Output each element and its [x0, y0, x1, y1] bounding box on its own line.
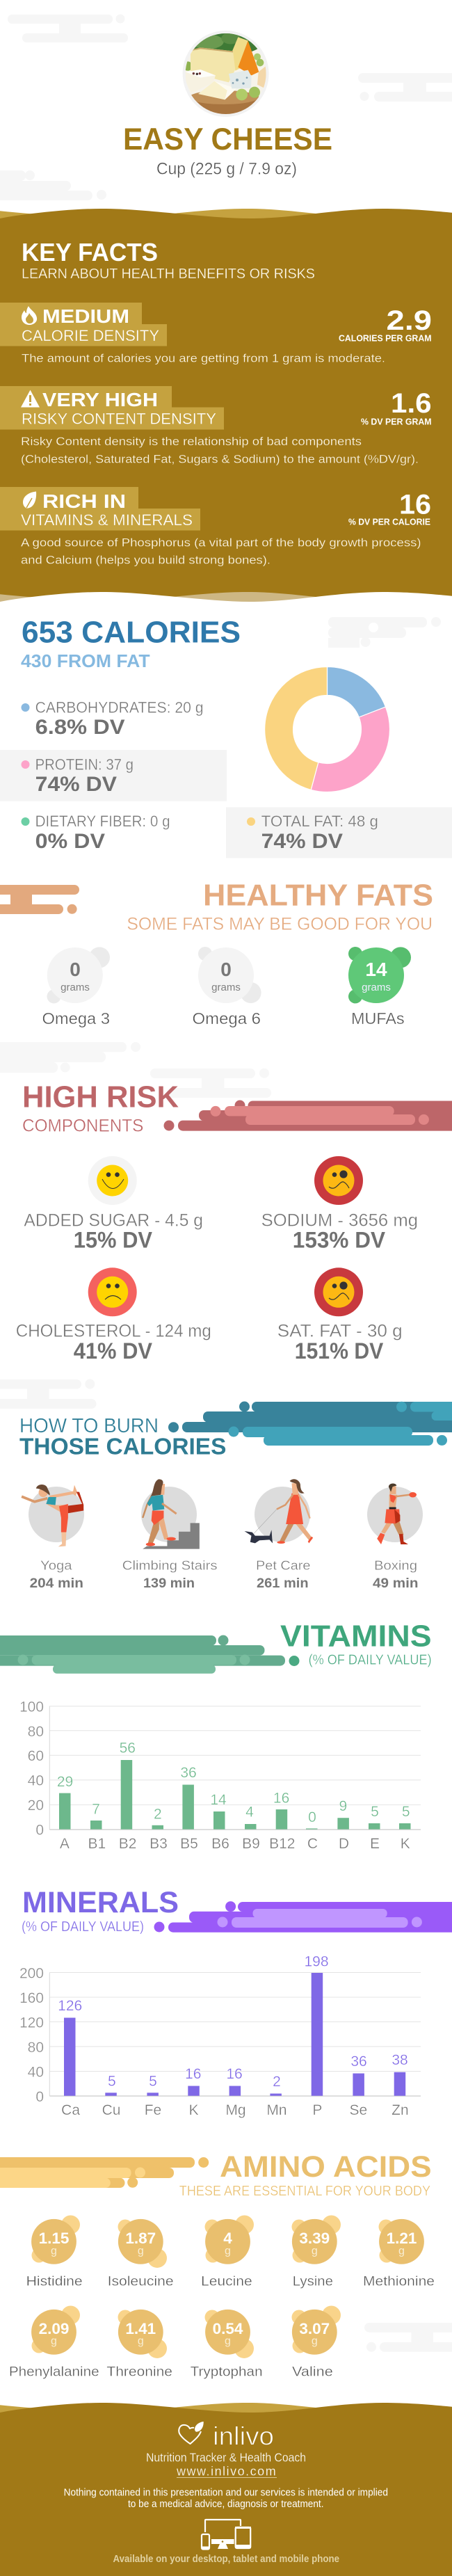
legend: protein	[21, 756, 134, 796]
heading: calories: 653 CALORIES	[22, 616, 241, 649]
amino: lysine: g	[312, 2245, 318, 2257]
bar chart: vitamins: E	[370, 1836, 380, 1852]
heading: minerals: MINERALS	[22, 1886, 179, 1919]
bar chart: minerals: 16	[185, 2066, 201, 2082]
activity: climbing stairs: Climbing Stairs	[122, 1558, 218, 1572]
bar chart: minerals: Fe	[145, 2102, 161, 2118]
panel: calories	[0, 616, 452, 858]
legend: total fat: TOTAL FAT: 48 g	[261, 813, 378, 830]
heading: vitamins: VITAMINS	[280, 1619, 432, 1653]
activity: boxing: Boxing	[374, 1558, 417, 1572]
bar chart: minerals: Cu	[102, 2102, 120, 2118]
subheading: components: COMPONENTS	[22, 1116, 143, 1135]
bar chart: vitamins: 9	[339, 1798, 347, 1814]
fact: risky content density: RISKY CONTENT DENSITY	[22, 410, 216, 427]
bar chart: vitamins: 7	[92, 1801, 100, 1817]
amino: valine: 3.07	[299, 2320, 330, 2337]
panel: vitamins	[0, 1619, 432, 1852]
activity: pet care: 261 min	[257, 1576, 309, 1591]
amino: isoleucine: 1.87	[125, 2230, 156, 2247]
amino: threonine	[106, 2310, 172, 2379]
bar chart: vitamins: 56	[120, 1740, 136, 1756]
risk: added sugar	[24, 1156, 203, 1252]
bar chart: vitamins: 80	[28, 1724, 44, 1740]
subheading: SOME FATS MAY BE GOOD FOR YOU	[127, 915, 433, 934]
activity: yoga	[22, 1485, 84, 1591]
amino: phenylalanine: 2.09	[39, 2320, 69, 2337]
fact: rich in vitamins and minerals: % DV PER CALORIE	[348, 517, 430, 527]
amino: methionine	[363, 2219, 435, 2289]
bar chart: minerals: 2	[273, 2074, 281, 2090]
risk: saturated fat	[277, 1267, 403, 1363]
bar chart: minerals: Ca	[61, 2102, 80, 2118]
image: cheese platter	[183, 28, 269, 117]
logo: inlivo: inlivo	[213, 2422, 274, 2451]
bar chart: minerals: 126	[58, 1998, 82, 2014]
amino: histidine: 1.15	[39, 2230, 69, 2247]
badge: mufas	[348, 947, 411, 1027]
disclaimer: Nothing contained in this presentation and our services is intended or implied	[64, 2487, 388, 2498]
fact: calorie density: MEDIUM	[42, 305, 129, 327]
amino: methionine: Methionine	[363, 2273, 435, 2289]
activity: boxing: 49 min	[373, 1576, 419, 1591]
legend: dietary fiber	[21, 813, 170, 853]
fact: calorie density: 2.9	[387, 305, 432, 336]
bar chart: minerals: 38	[392, 2052, 408, 2068]
icon: flame	[22, 306, 37, 325]
amino: threonine: 1.41	[125, 2320, 156, 2337]
bar chart: vitamins	[19, 1699, 421, 1852]
bar chart: vitamins: 4	[245, 1805, 254, 1821]
bar chart: vitamins: B2	[119, 1836, 136, 1852]
legend: total fat: 74% DV	[261, 830, 343, 853]
bar chart: vitamins: 5	[371, 1804, 379, 1820]
amino: leucine: g	[225, 2245, 231, 2257]
bar chart: vitamins: D	[339, 1836, 349, 1852]
heading: healthy fats: HEALTHY FATS	[203, 879, 433, 912]
amino: valine	[292, 2305, 341, 2379]
bar chart: minerals: Mg	[225, 2102, 246, 2118]
panel: high risk	[0, 1042, 452, 1363]
bar chart: vitamins: B3	[150, 1836, 168, 1852]
panel: healthy fats	[0, 879, 433, 1027]
badge: omega 3: Omega 3	[42, 1009, 110, 1027]
bar chart: vitamins: 36	[180, 1765, 197, 1781]
risk: cholesterol: 41% DV	[74, 1338, 153, 1363]
disclaimer	[64, 2487, 388, 2510]
badge: omega 6: 0	[220, 959, 232, 980]
activity: climbing stairs	[122, 1479, 218, 1591]
activity: yoga: 204 min	[30, 1576, 83, 1591]
risk: cholesterol	[16, 1267, 211, 1363]
amino: histidine: g	[51, 2245, 57, 2257]
heading: key facts: KEY FACTS	[22, 238, 158, 266]
bar chart: minerals: 200	[19, 1966, 44, 1981]
bar chart: minerals: 80	[28, 2040, 44, 2056]
heading: those calories: THOSE CALORIES	[19, 1434, 226, 1459]
donut chart	[265, 666, 389, 792]
amino: threonine: Threonine	[106, 2364, 172, 2379]
amino: isoleucine: g	[138, 2245, 144, 2257]
amino: histidine: Histidine	[26, 2273, 83, 2289]
legend: carbohydrates: CARBOHYDRATES: 20 g	[35, 698, 204, 717]
amino: lysine: Lysine	[293, 2273, 333, 2289]
fact: calorie density: CALORIES PER GRAM	[339, 333, 431, 344]
fact: rich in vitamins and minerals: A good source of Phosphorus (a vital part of the body growth process)	[21, 536, 421, 549]
activity: pet care: Pet Care	[256, 1558, 310, 1572]
amino: methionine: g	[398, 2245, 405, 2257]
bar chart: vitamins: B6	[211, 1836, 229, 1852]
badge: mufas: MUFAs	[351, 1009, 405, 1027]
bar chart: vitamins: 14	[210, 1792, 227, 1808]
risk: saturated fat: SAT. FAT - 30 g	[277, 1322, 403, 1341]
bar chart: minerals: 16	[226, 2066, 243, 2082]
fact: calorie density	[0, 303, 432, 365]
bar chart: minerals	[19, 1953, 421, 2118]
activity: boxing	[367, 1484, 423, 1591]
amino: valine: Valine	[292, 2364, 333, 2379]
amino: phenylalanine: g	[51, 2335, 57, 2347]
bar chart: vitamins: 0	[308, 1809, 316, 1825]
fact: risky content density: % DV PER GRAM	[361, 416, 432, 426]
legend: carbohydrates	[21, 698, 204, 739]
fact: risky content density: VERY HIGH	[42, 389, 158, 410]
amino: tryptophan: g	[225, 2335, 231, 2347]
bar chart: minerals: Mn	[266, 2102, 287, 2118]
subheading: (% OF DAILY VALUE)	[309, 1653, 432, 1668]
fact: rich in vitamins and minerals: RICH IN	[42, 490, 126, 512]
risk: sodium: SODIUM - 3656 mg	[261, 1210, 418, 1230]
bar chart: vitamins: 16	[273, 1790, 289, 1806]
badge: omega 3: grams	[60, 982, 90, 993]
bar chart: minerals: P	[312, 2102, 322, 2118]
risk: added sugar: ADDED SUGAR - 4.5 g	[24, 1210, 203, 1230]
amino: lysine	[292, 2215, 341, 2289]
icon: warning triangle	[21, 390, 40, 408]
badge: omega 6: grams	[211, 982, 241, 993]
bar chart: vitamins: K	[401, 1836, 410, 1852]
fact: risky content density: Risky Content density is the relationship of bad components	[21, 435, 362, 448]
logo: inlivo	[179, 2422, 274, 2451]
amino: leucine: 4	[223, 2230, 232, 2247]
panel: key facts	[0, 209, 452, 607]
bar chart: vitamins: A	[60, 1836, 70, 1852]
subheading: from fat: 430 FROM FAT	[21, 650, 150, 671]
icon: devices	[202, 2520, 251, 2550]
risk: added sugar: 15% DV	[74, 1227, 153, 1252]
bar chart: minerals: 160	[19, 1990, 44, 2006]
bar chart: minerals: 120	[19, 2015, 44, 2031]
fact: rich in vitamins and minerals: VITAMINS & MINERALS	[21, 511, 193, 529]
activity: pet care	[245, 1479, 313, 1591]
tagline: Nutrition Tracker & Health Coach	[146, 2450, 306, 2464]
activity: yoga: Yoga	[40, 1558, 72, 1572]
bar chart: vitamins: 60	[28, 1748, 44, 1764]
bar chart: minerals: 36	[350, 2054, 367, 2070]
subheading: (% OF DAILY VALUE)	[22, 1919, 144, 1935]
fact: calorie density: The amount of calories you are getting from 1 gram is moderate.	[22, 352, 385, 365]
legend: dietary fiber: 0% DV	[35, 830, 105, 853]
badge: mufas: 14	[365, 959, 387, 980]
legend: protein: 74% DV	[35, 773, 117, 796]
title: EASY CHEESE	[123, 122, 332, 157]
amino: tryptophan: Tryptophan	[191, 2364, 263, 2379]
bar chart: vitamins: B1	[88, 1836, 106, 1852]
risk: sodium	[261, 1156, 418, 1252]
panel: how to burn	[0, 1379, 452, 1591]
amino: phenylalanine: Phenylalanine	[9, 2364, 99, 2379]
fact: rich in vitamins and minerals: and Calcium (helps you build strong bones).	[21, 554, 271, 567]
fact: risky content density	[0, 386, 432, 466]
bar chart: minerals: 198	[304, 1953, 329, 1969]
activity: climbing stairs: 139 min	[143, 1576, 195, 1591]
bar chart: vitamins: 2	[154, 1806, 162, 1822]
icon: leaf	[23, 491, 36, 509]
bar chart: vitamins: 29	[57, 1774, 73, 1790]
risk: saturated fat: 151% DV	[295, 1338, 384, 1363]
bar chart: vitamins: 0	[35, 1823, 44, 1839]
subheading: LEARN ABOUT HEALTH BENEFITS OR RISKS	[22, 266, 315, 282]
fact: risky content density: 1.6	[391, 388, 432, 419]
fact: risky content density: (Cholesterol, Saturated Fat, Sugars & Sodium) to the amount (%DV/gr).	[21, 454, 419, 466]
website: www.inlivo.com	[176, 2464, 276, 2478]
heading: high risk: HIGH RISK	[22, 1081, 179, 1114]
bar chart: minerals: 5	[108, 2073, 116, 2090]
bar chart: vitamins: B12	[269, 1836, 295, 1852]
bar chart: vitamins: 40	[28, 1773, 44, 1789]
bar chart: minerals: 40	[28, 2065, 44, 2080]
bar chart: minerals: 0	[35, 2089, 44, 2105]
panel: footer	[0, 2403, 452, 2576]
panel: amino acids	[0, 2150, 452, 2379]
badge: omega 6	[192, 947, 261, 1027]
disclaimer: to be a medical advice, diagnosis or treatment.	[128, 2499, 324, 2510]
bar chart: vitamins: B9	[242, 1836, 260, 1852]
bar chart: minerals: Zn	[392, 2102, 409, 2118]
serving size: Cup (225 g / 7.9 oz)	[156, 160, 297, 179]
fact: calorie density: CALORIE DENSITY	[22, 327, 159, 344]
risk: cholesterol: CHOLESTEROL - 124 mg	[16, 1322, 211, 1341]
legend: protein: PROTEIN: 37 g	[35, 756, 134, 774]
badge: omega 3: 0	[70, 959, 81, 980]
fact: rich in vitamins and minerals	[0, 487, 431, 567]
panel: minerals	[19, 1886, 452, 2118]
panel: header	[0, 14, 452, 200]
fact: rich in vitamins and minerals: 16	[399, 490, 431, 520]
bar chart: minerals: K	[189, 2102, 199, 2118]
amino: methionine: 1.21	[387, 2230, 417, 2247]
amino: isoleucine: Isoleucine	[108, 2273, 174, 2289]
bar chart: minerals: 5	[149, 2073, 157, 2090]
heading: how to burn: HOW TO BURN	[19, 1415, 159, 1437]
amino: valine: g	[312, 2335, 318, 2347]
badge: mufas: grams	[362, 982, 391, 993]
badge: omega 6: Omega 6	[192, 1009, 261, 1027]
legend: dietary fiber: DIETARY FIBER: 0 g	[35, 813, 170, 830]
legend: total fat	[247, 813, 378, 853]
heading: amino acids: AMINO ACIDS	[220, 2150, 432, 2184]
amino: isoleucine	[108, 2219, 174, 2289]
legend: carbohydrates: 6.8% DV	[35, 716, 125, 739]
bar chart: vitamins: 100	[19, 1699, 44, 1715]
bar chart: minerals: Se	[349, 2102, 367, 2118]
amino: histidine	[26, 2215, 83, 2289]
bar chart: vitamins: 5	[402, 1804, 410, 1820]
amino: leucine: Leucine	[201, 2273, 252, 2289]
bar chart: vitamins: C	[307, 1836, 318, 1852]
amino: leucine	[201, 2215, 254, 2289]
amino: lysine: 3.39	[299, 2230, 330, 2247]
badge: omega 3	[42, 947, 110, 1027]
risk: sodium: 153% DV	[293, 1227, 386, 1252]
availability note: Available on your desktop, tablet and mobile phone	[113, 2554, 339, 2565]
amino: tryptophan	[191, 2310, 263, 2379]
bar chart: vitamins: B5	[180, 1836, 198, 1852]
amino: phenylalanine	[9, 2305, 99, 2379]
amino: threonine: g	[138, 2335, 144, 2347]
amino: tryptophan: 0.54	[213, 2320, 243, 2337]
bar chart: vitamins: 20	[28, 1798, 44, 1814]
